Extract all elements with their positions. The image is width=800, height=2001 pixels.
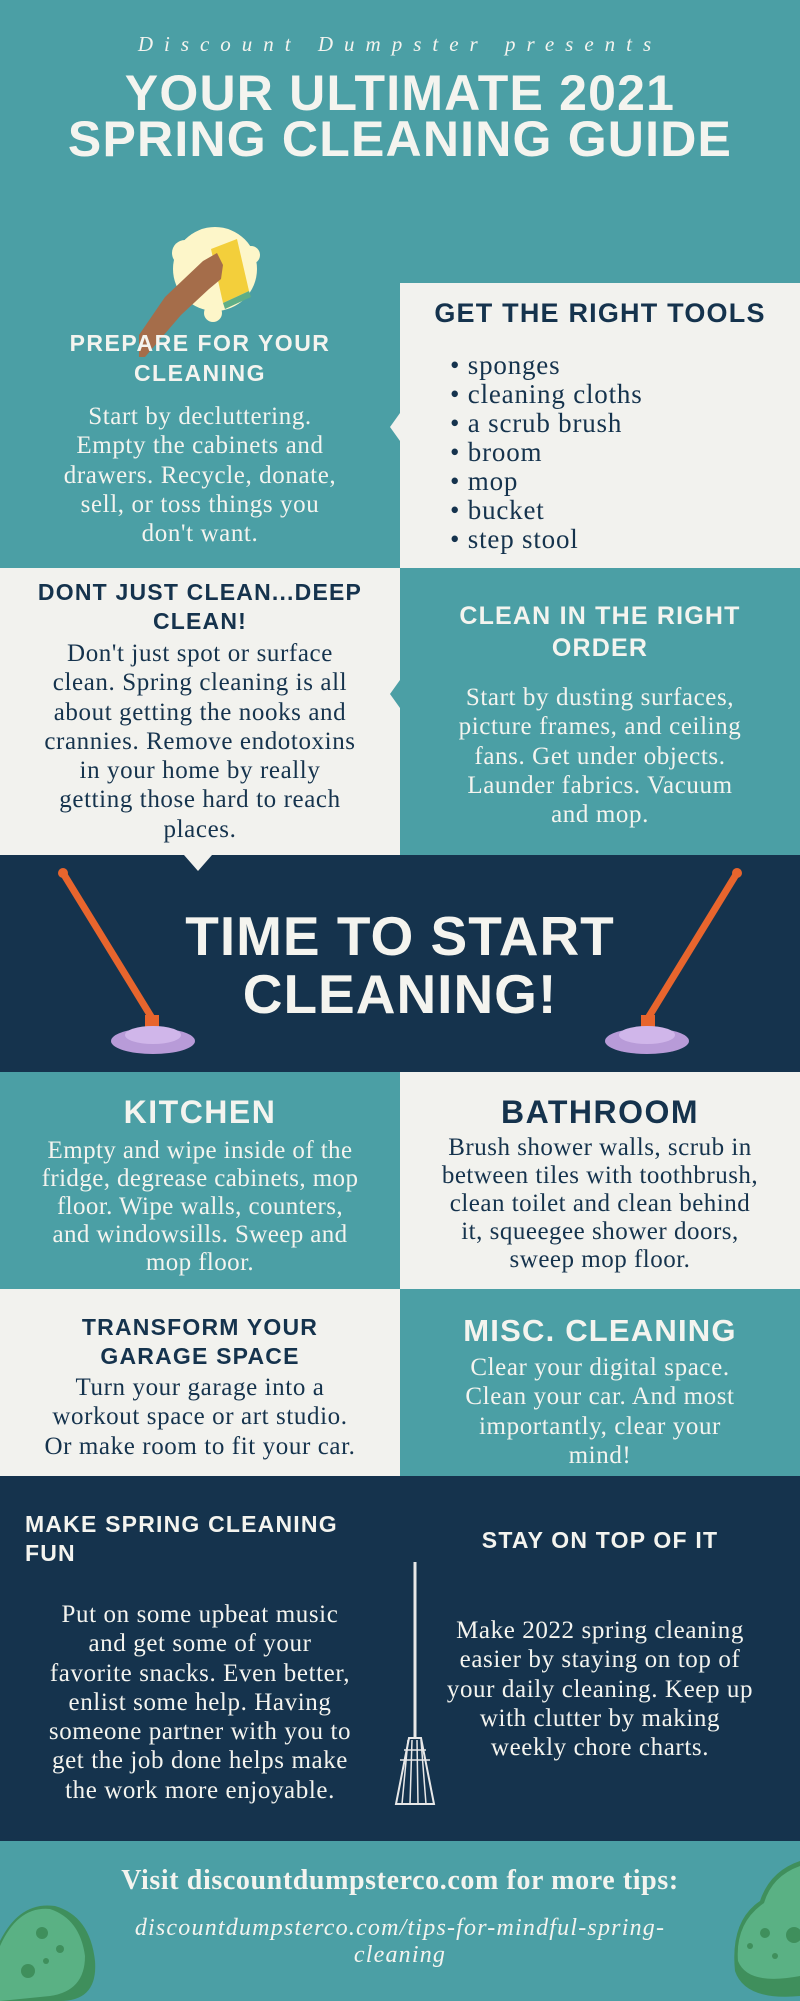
- icon: sponge left: [0, 1906, 96, 2001]
- link text: [135, 1915, 665, 1968]
- heading: KITCHEN: [124, 1094, 276, 1130]
- heading: TRANSFORM YOUR: [82, 1314, 318, 1340]
- text: [442, 1134, 758, 1273]
- panel: fun and stay on top: [0, 1476, 800, 1841]
- panel: time to start: [0, 855, 800, 1072]
- heading: [82, 1314, 318, 1369]
- subtitle: Discount Dumpster presents: [138, 32, 662, 56]
- panel: tools: [400, 283, 800, 568]
- text: fridge, degrease cabinets, mop: [42, 1165, 358, 1192]
- text: and mop.: [551, 801, 649, 828]
- text: sell, or toss things you: [81, 491, 319, 518]
- heading: fun: FUN: [25, 1540, 76, 1566]
- text: stay on top: [447, 1617, 753, 1761]
- panel: deep clean: [0, 568, 400, 855]
- heading: MISC. CLEANING: [463, 1313, 737, 1348]
- text: Start by decluttering.: [88, 403, 312, 430]
- link text: cleaning: [354, 1942, 446, 1968]
- list: • a scrub brush: [450, 408, 622, 438]
- heading: DONT JUST CLEAN...DEEP: [38, 579, 362, 605]
- text: crannies. Remove endotoxins: [44, 728, 356, 755]
- arrow down: [184, 855, 212, 871]
- text: Turn your garage into a: [76, 1374, 324, 1401]
- heading: ORDER: [552, 634, 648, 662]
- panel: misc: [400, 1289, 800, 1476]
- text: [459, 684, 741, 828]
- text: getting those hard to reach: [59, 786, 341, 813]
- panel: order: [400, 568, 800, 855]
- text: [465, 1354, 735, 1469]
- text: workout space or art studio.: [52, 1403, 348, 1430]
- title: YOUR ULTIMATE 2021: [125, 65, 675, 121]
- heading: GARAGE SPACE: [100, 1343, 300, 1369]
- text: clean toilet and clean behind: [450, 1190, 750, 1217]
- text: fun: someone partner with you to: [49, 1718, 351, 1745]
- panel: prepare: [0, 283, 400, 568]
- text: Or make room to fit your car.: [44, 1433, 356, 1460]
- panel: footer: [0, 1841, 800, 2000]
- text: fun: and get some of your: [88, 1630, 312, 1657]
- text: sweep mop floor.: [510, 1246, 690, 1273]
- text: importantly, clear your: [479, 1413, 721, 1440]
- title: TIME TO START: [185, 905, 615, 967]
- text: fans. Get under objects.: [474, 743, 726, 770]
- text: fun: the work more enjoyable.: [65, 1777, 335, 1804]
- text: stay on top: weekly chore charts.: [491, 1734, 709, 1761]
- arrow: [390, 413, 400, 441]
- panel: kitchen: [0, 1072, 400, 1289]
- text: it, squeegee shower doors,: [461, 1218, 739, 1245]
- link text: discountdumpsterco.com/tips-for-mindful-spring-: [135, 1915, 665, 1941]
- text: stay on top: your daily cleaning. Keep up: [447, 1676, 753, 1703]
- heading: GET THE RIGHT TOOLS: [434, 298, 766, 328]
- heading: BATHROOM: [501, 1094, 699, 1130]
- text: [42, 1137, 358, 1276]
- heading: [70, 330, 330, 386]
- panel: garage: [0, 1289, 400, 1476]
- text: between tiles with toothbrush,: [442, 1162, 758, 1189]
- text: fun: enlist some help. Having: [68, 1689, 331, 1716]
- text: Empty the cabinets and: [76, 432, 324, 459]
- icon: sponge right: [734, 1861, 800, 1997]
- text: mind!: [569, 1442, 631, 1469]
- heading: visit: Visit discountdumpsterco.com for more tips:: [121, 1865, 679, 1896]
- list: • broom: [450, 437, 542, 467]
- text: picture frames, and ceiling: [459, 713, 741, 740]
- list: [450, 350, 643, 554]
- heading: fun: MAKE SPRING CLEANING: [25, 1511, 338, 1537]
- heading: CLEAN!: [153, 608, 247, 634]
- icon: broom: [394, 1562, 436, 1805]
- text: [64, 403, 336, 547]
- text: [44, 640, 356, 843]
- text: Brush shower walls, scrub in: [448, 1134, 752, 1161]
- title: [185, 905, 615, 1025]
- text: places.: [164, 816, 236, 843]
- text: fun: favorite snacks. Even better,: [50, 1660, 350, 1687]
- text: Clean your car. And most: [465, 1383, 735, 1410]
- panel: header: [0, 0, 800, 283]
- icon: mop right: [605, 868, 742, 1054]
- title: SPRING CLEANING GUIDE: [68, 111, 732, 167]
- text: in your home by really: [80, 757, 320, 784]
- text: floor. Wipe walls, counters,: [57, 1193, 343, 1220]
- text: fun: Put on some upbeat music: [62, 1601, 338, 1628]
- heading: [459, 602, 741, 662]
- arrow down: [593, 568, 621, 584]
- text: clean. Spring cleaning is all: [53, 669, 347, 696]
- text: Start by dusting surfaces,: [466, 684, 734, 711]
- text: stay on top: Make 2022 spring cleaning: [456, 1617, 744, 1644]
- text: Empty and wipe inside of the: [48, 1137, 352, 1164]
- icon: mop left: [58, 868, 195, 1054]
- list: • bucket: [450, 495, 545, 525]
- heading: CLEANING: [134, 360, 266, 386]
- heading: fun: [25, 1511, 338, 1566]
- text: Don't just spot or surface: [67, 640, 333, 667]
- text: stay on top: easier by staying on top of: [460, 1646, 740, 1673]
- title: [68, 65, 732, 167]
- text: drawers. Recycle, donate,: [64, 462, 336, 489]
- heading: PREPARE FOR YOUR: [70, 330, 330, 356]
- icon: hand with sponge: [139, 227, 260, 357]
- text: stay on top: with clutter by making: [480, 1705, 720, 1732]
- text: Clear your digital space.: [470, 1354, 730, 1381]
- text: fun: get the job done helps make: [52, 1747, 348, 1774]
- arrow: [390, 680, 400, 708]
- text: don't want.: [142, 520, 258, 547]
- text: and windowsills. Sweep and: [52, 1221, 348, 1248]
- text: [44, 1374, 356, 1460]
- text: fun: [49, 1601, 351, 1804]
- text: about getting the nooks and: [54, 699, 346, 726]
- text: mop floor.: [146, 1249, 254, 1276]
- heading: CLEAN IN THE RIGHT: [459, 602, 741, 630]
- list: • sponges: [450, 350, 560, 380]
- list: • cleaning cloths: [450, 379, 643, 409]
- title: CLEANING!: [243, 963, 557, 1025]
- heading: stay on top: STAY ON TOP OF IT: [482, 1527, 718, 1553]
- heading: [38, 579, 362, 634]
- list: • step stool: [450, 524, 579, 554]
- text: Launder fabrics. Vacuum: [467, 772, 733, 799]
- list: • mop: [450, 466, 518, 496]
- panel: bathroom: [400, 1072, 800, 1289]
